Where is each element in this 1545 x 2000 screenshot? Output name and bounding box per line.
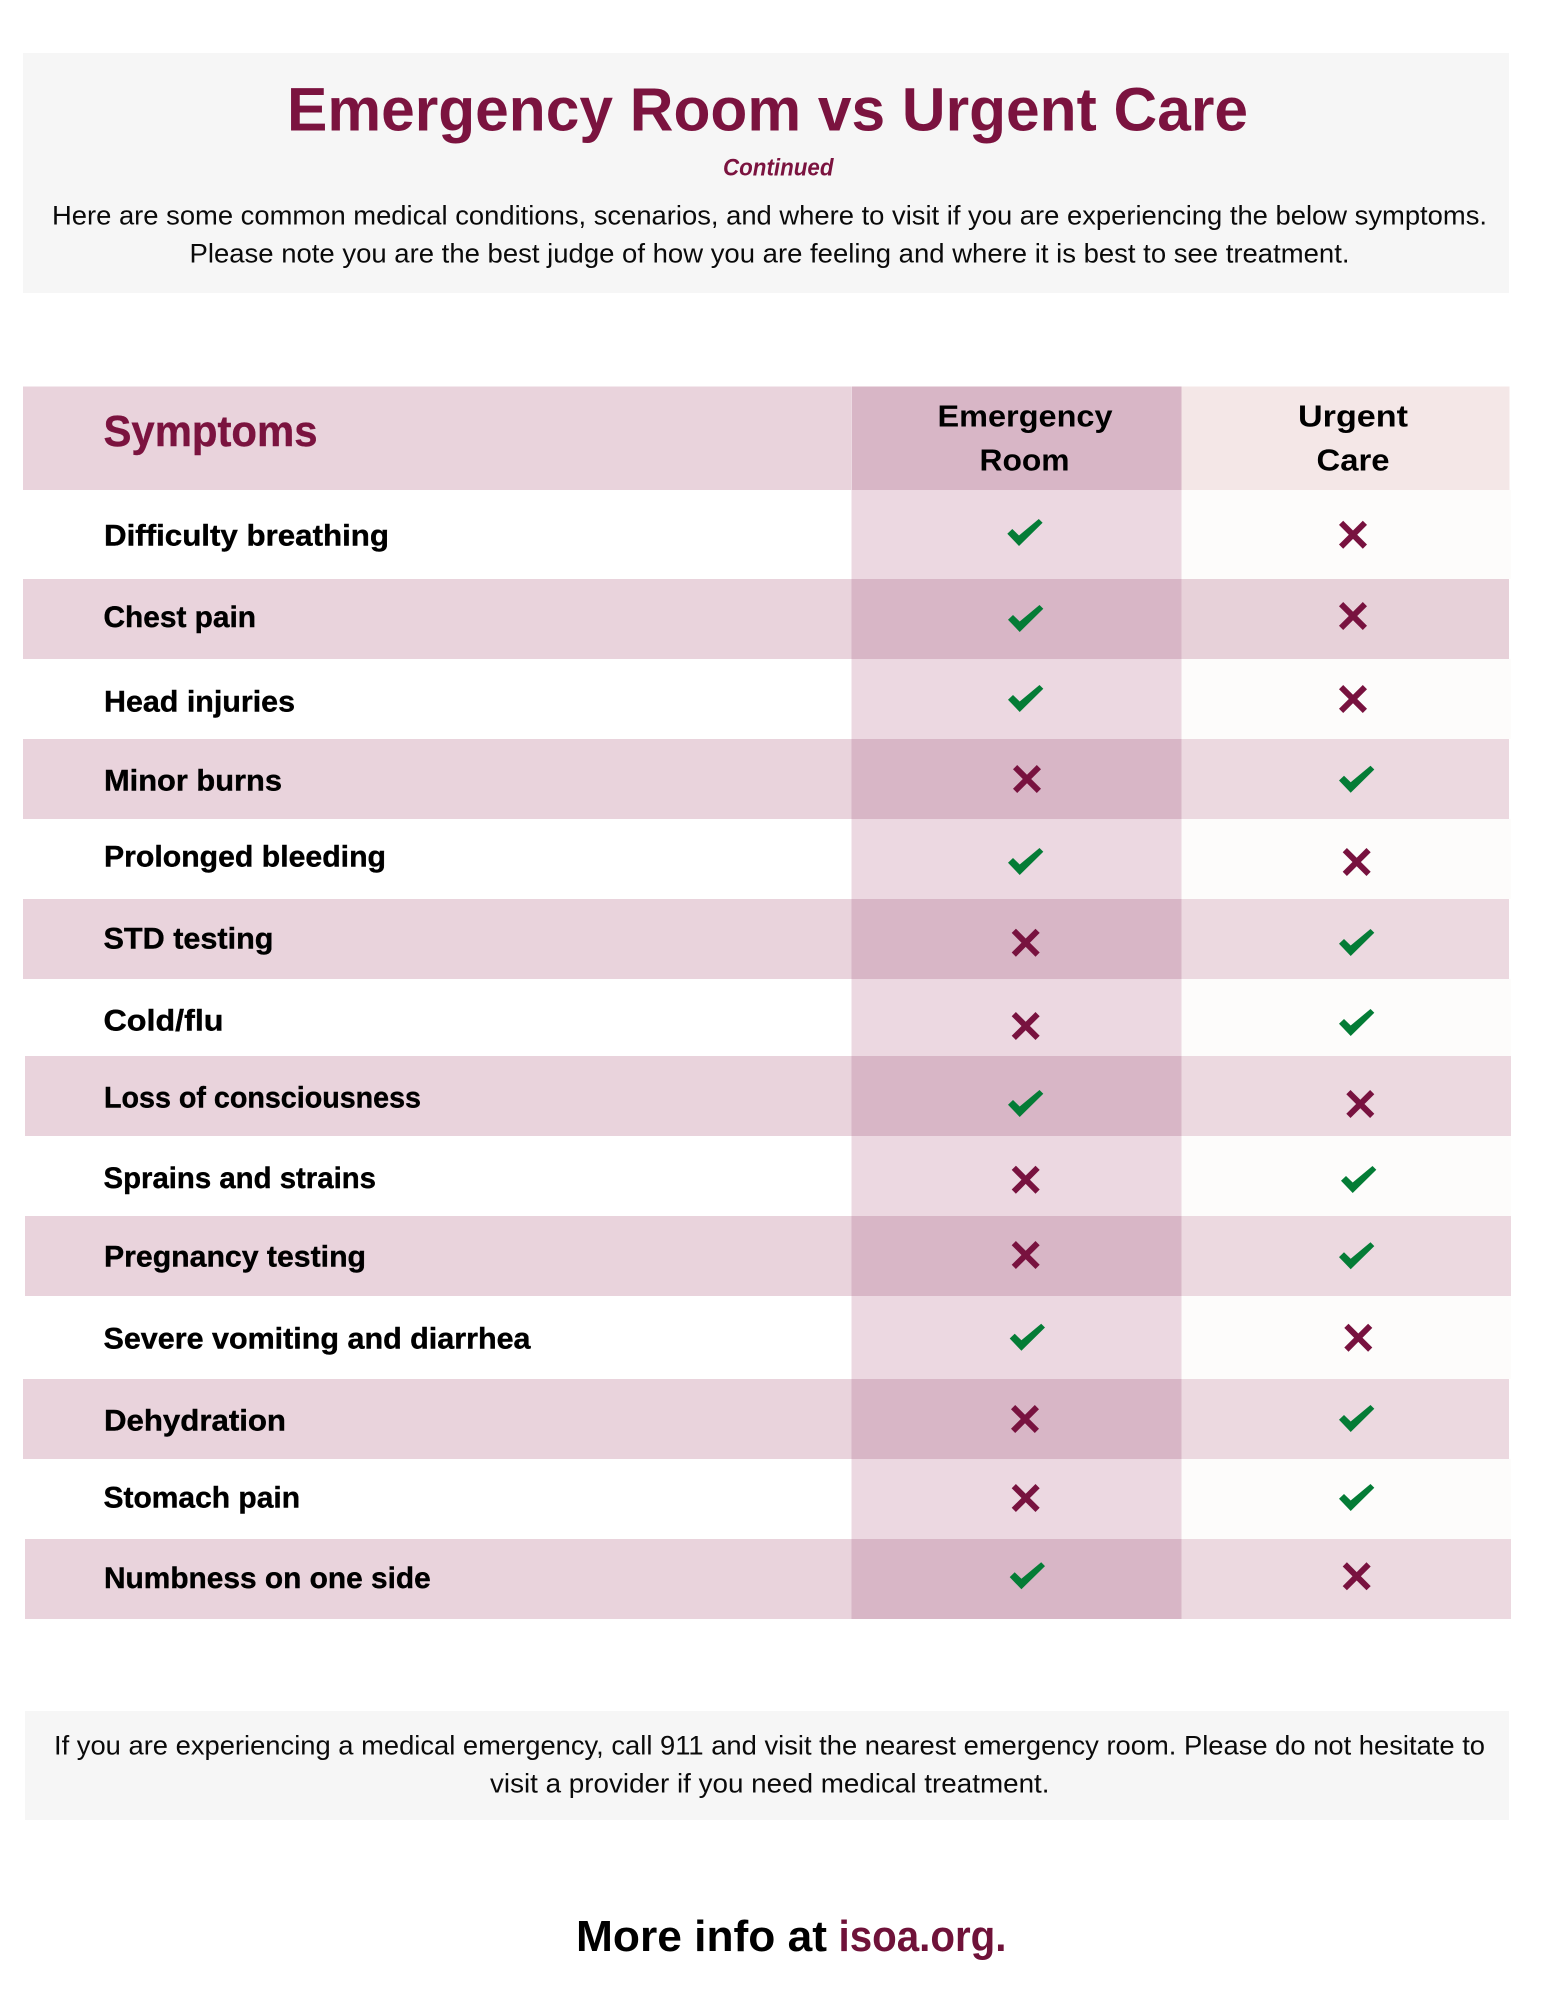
intro text: Here are some common medical conditions, scenarios, and where to visit if you are experiencing the below symptoms. xyxy=(52,200,1487,230)
heading: urgent care: Urgent xyxy=(1298,398,1408,434)
row: difficulty breathing: Difficulty breathing xyxy=(104,520,389,553)
row: minor burns: Minor burns xyxy=(104,765,282,798)
row: severe vomiting and diarrhea: Severe vomiting and diarrhea xyxy=(104,1322,531,1355)
row: chest pain xyxy=(23,579,1509,659)
heading: urgent care xyxy=(1298,398,1408,478)
row: dehydration xyxy=(23,1379,1509,1459)
heading: emergency room xyxy=(938,398,1113,478)
row: std testing xyxy=(23,899,1509,979)
row: chest pain: Chest pain xyxy=(104,601,256,634)
row: prolonged bleeding: Prolonged bleeding xyxy=(104,841,386,874)
row: difficulty breathing xyxy=(104,490,1511,579)
heading: emergency room: Room xyxy=(980,442,1070,478)
row: loss of consciousness: Loss of consciousness xyxy=(104,1081,421,1114)
title: Emergency Room vs Urgent Care xyxy=(287,76,1248,144)
row: numbness on one side xyxy=(25,1539,1511,1619)
row: head injuries xyxy=(104,659,1511,739)
panel: header intro xyxy=(23,53,1509,293)
table header row xyxy=(23,386,1510,490)
row: cold/flu xyxy=(104,979,1511,1056)
heading: emergency room: Emergency xyxy=(938,398,1113,434)
panel: emergency note: visit a provider if you need medical treatment. xyxy=(490,1768,1050,1798)
row: severe vomiting and diarrhea xyxy=(104,1296,1511,1379)
row: numbness on one side: Numbness on one side xyxy=(104,1562,431,1595)
call to action: more info xyxy=(576,1912,1006,1961)
row: cold/flu: Cold/flu xyxy=(104,1005,224,1038)
row: pregnancy testing: Pregnancy testing xyxy=(104,1241,366,1274)
row: stomach pain: Stomach pain xyxy=(104,1481,300,1514)
heading: urgent care: Care xyxy=(1316,442,1390,478)
row: dehydration: Dehydration xyxy=(104,1405,286,1438)
row: prolonged bleeding xyxy=(104,819,1511,899)
row: sprains and strains xyxy=(104,1136,1511,1216)
intro text xyxy=(52,200,1487,268)
intro text: Please note you are the best judge of how you are feeling and where it is best to see treatment. xyxy=(190,238,1350,268)
row: stomach pain xyxy=(104,1459,1511,1539)
call to action: more info: isoa.org. xyxy=(838,1912,1006,1961)
row: minor burns xyxy=(23,739,1509,819)
heading: symptoms: Symptoms xyxy=(104,407,318,456)
row: head injuries: Head injuries xyxy=(104,686,295,719)
table: symptoms comparison xyxy=(23,386,1511,1619)
row: std testing: STD testing xyxy=(104,922,274,955)
panel: emergency note: If you are experiencing a medical emergency, call 911 and visit the nearest emergency room. Please do not hesitate to xyxy=(54,1730,1485,1760)
panel: emergency note xyxy=(25,1711,1509,1820)
row: sprains and strains: Sprains and strains xyxy=(104,1162,376,1195)
row: loss of consciousness xyxy=(25,1056,1511,1136)
call to action: more info: More info at xyxy=(576,1912,827,1961)
subtitle: continued: Continued xyxy=(723,154,835,182)
row: pregnancy testing xyxy=(25,1216,1511,1296)
